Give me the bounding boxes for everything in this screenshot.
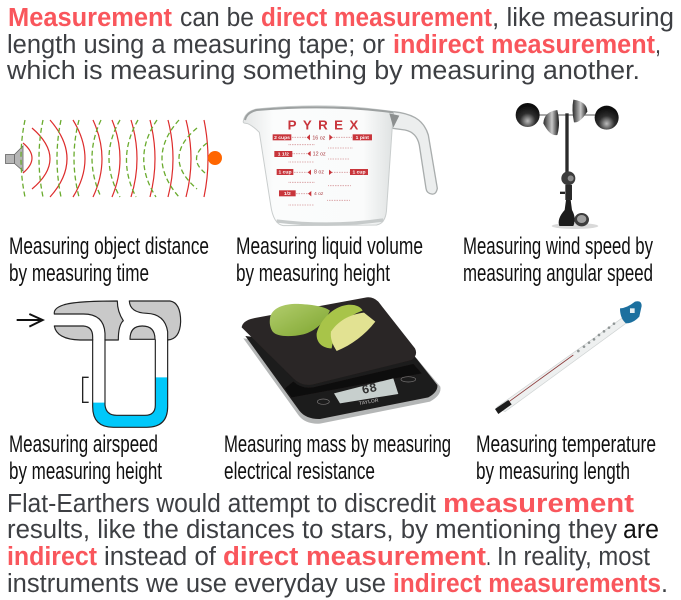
closing paragraph: . <box>661 570 668 598</box>
caption: object distance: Measuring object distance <box>9 233 209 260</box>
tube outline <box>93 339 168 427</box>
apple pieces <box>270 304 330 336</box>
brand and volume markings: 1 cup <box>278 170 292 176</box>
scale base <box>243 338 441 424</box>
heading paragraph: length using a measuring tape; or <box>7 31 385 59</box>
closing paragraph: instead of <box>104 543 217 571</box>
caption row 1 <box>9 233 653 287</box>
caption: mass: electrical resistance <box>224 458 375 485</box>
brand and volume markings: 8 oz <box>314 170 324 176</box>
heading paragraph: which is measuring something by measuring another. <box>6 57 640 85</box>
LCD display <box>334 378 398 403</box>
closing paragraph: measurement <box>443 490 635 518</box>
brand and volume markings <box>273 117 372 205</box>
heading paragraph: can be <box>180 4 254 32</box>
icon: orange object <box>208 151 222 165</box>
caption row 2 <box>9 431 656 485</box>
closing paragraph: instruments we use everyday use <box>7 570 386 598</box>
heading paragraph: indirect measurement <box>393 31 655 59</box>
caption: airspeed: by measuring height <box>9 458 162 485</box>
photo: thermometer <box>495 301 642 414</box>
closing paragraph: are <box>623 516 659 544</box>
height bracket <box>83 377 89 402</box>
scale buttons <box>317 399 329 404</box>
brand and volume markings: 1 pint <box>356 135 369 141</box>
caption: object distance: by measuring time <box>9 260 149 287</box>
heading paragraph: direct measurement <box>261 4 492 32</box>
brand and volume markings: 16 oz <box>312 135 326 141</box>
closing paragraph: results, like the distances to stars, by mentioning they <box>7 516 617 544</box>
caption: airspeed: Measuring airspeed <box>9 431 158 458</box>
closing paragraph: indirect <box>7 543 97 571</box>
closing paragraph: In reality, most <box>497 543 650 571</box>
closing paragraph <box>7 490 668 598</box>
heading paragraph: , <box>655 31 661 59</box>
scale top plate <box>242 297 416 385</box>
diagram: pitot U-tube manometer <box>17 301 181 427</box>
heading paragraph: , like measuring <box>492 4 674 32</box>
heading paragraph <box>6 4 674 85</box>
caption: wind speed <box>463 233 653 287</box>
outgoing red wavefronts <box>23 120 208 197</box>
diagram: sound waves from speaker to object <box>6 120 222 197</box>
icon: speaker <box>6 146 23 171</box>
returning green dashed wavefronts <box>21 120 207 197</box>
blue liquid <box>93 377 168 427</box>
closing paragraph: . <box>486 543 491 571</box>
brand and volume markings: 1 1/2 <box>278 152 289 158</box>
closing paragraph: Flat-Earthers would attempt to discredit <box>7 490 436 518</box>
caption: airspeed <box>9 431 162 485</box>
caption: temperature <box>476 431 656 485</box>
caption: mass <box>224 431 451 485</box>
caption: mass: Measuring mass by measuring <box>224 431 451 458</box>
heading paragraph: Measurement <box>8 4 172 32</box>
photo: anemometer <box>516 100 619 229</box>
photo: kitchen scale with apple: 68 <box>360 380 378 398</box>
brand and volume markings: 2 cups <box>274 135 290 141</box>
photo: kitchen scale with apple: TAYLOR <box>359 398 379 407</box>
arrow <box>17 314 43 327</box>
caption: liquid volume: by measuring height <box>236 260 390 287</box>
closing paragraph: indirect measurements <box>393 570 661 598</box>
brand and volume markings: PYREX <box>288 117 358 132</box>
closing paragraph: direct measurement <box>223 543 487 571</box>
caption: liquid volume <box>236 233 423 287</box>
brand and volume markings: 12 oz <box>313 151 326 157</box>
caption: object distance <box>9 233 209 287</box>
brand and volume markings: 4 oz <box>314 191 324 197</box>
brand and volume markings: 1 cup <box>352 170 366 176</box>
photo: kitchen scale with apple <box>242 297 441 424</box>
gray body <box>54 301 181 340</box>
brand and volume markings: 1/2 <box>284 191 291 197</box>
caption: liquid volume: Measuring liquid volume <box>236 233 423 260</box>
photo: Pyrex measuring cup <box>243 106 437 226</box>
